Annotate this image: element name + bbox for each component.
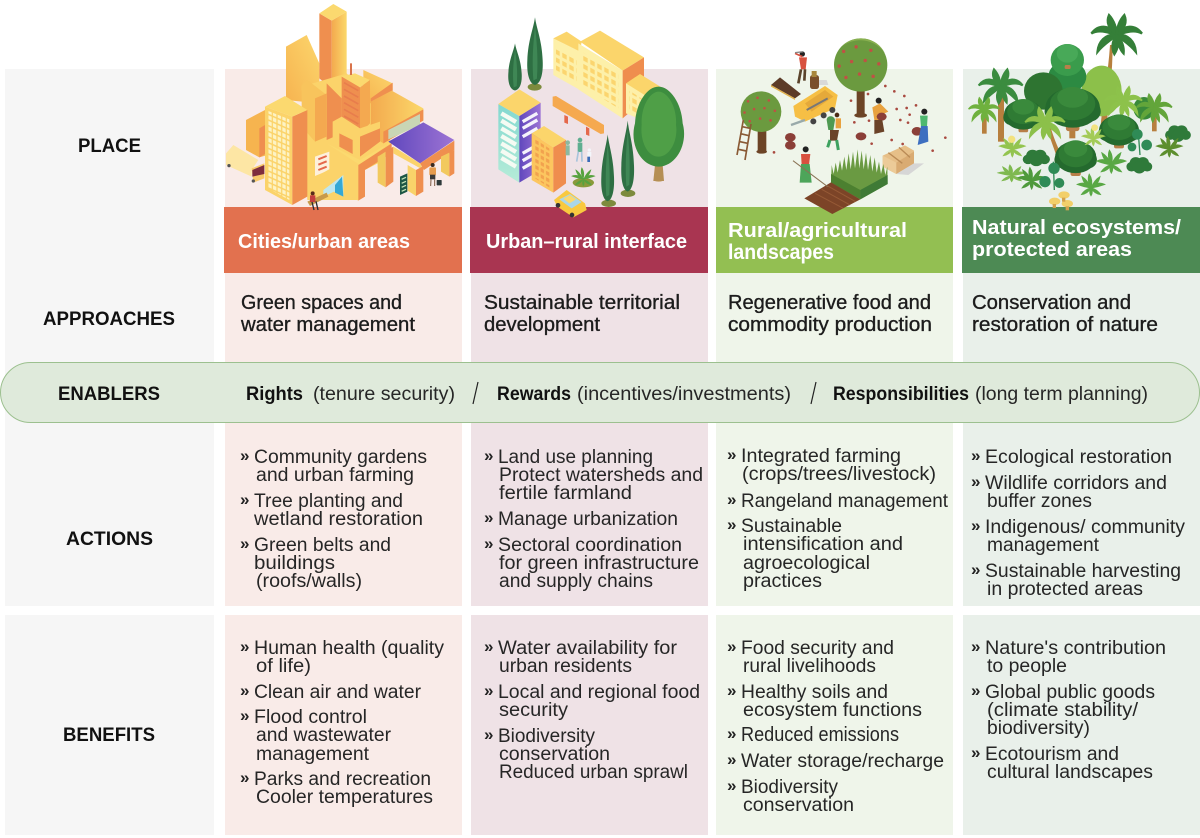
row label: benefits: BENEFITS (63, 725, 155, 746)
approaches text: rural: Regenerative food and (728, 292, 931, 314)
actions list: interface: » (484, 534, 493, 553)
header bar: natural: protected areas (972, 239, 1132, 261)
actions list: natural: in protected areas (987, 579, 1143, 600)
actions list: natural: management (987, 535, 1100, 556)
approaches text: interface: development (484, 314, 600, 336)
benefits list: interface: Biodiversity (498, 726, 595, 747)
panel: cities upper background (225, 69, 462, 606)
enablers band: Rights (246, 384, 303, 405)
actions list: cities (240, 446, 427, 592)
actions list: rural: » (727, 515, 736, 534)
benefits list: natural: biodiversity) (987, 718, 1090, 739)
benefits list: natural: Global public goods (985, 682, 1155, 703)
panel: label column upper background (5, 69, 214, 606)
benefits list: natural: » (971, 637, 980, 656)
approaches text: natural: restoration of nature (972, 314, 1158, 336)
benefits list: cities: » (240, 706, 249, 725)
enablers band: Responsibilities (833, 384, 969, 405)
actions list: natural: » (971, 472, 980, 491)
benefits list: natural: » (971, 743, 980, 762)
illustration: city buildings (226, 4, 454, 210)
illustration: rural farm scene (737, 38, 947, 214)
actions list: rural: Sustainable (741, 516, 842, 537)
benefits list: interface: » (484, 681, 493, 700)
header bar: rural: Rural/agricultural (728, 220, 907, 242)
actions list: rural: » (727, 490, 736, 509)
actions list: cities: » (240, 490, 249, 509)
enablers band: ENABLERS (58, 384, 160, 405)
benefits list: cities: Clean air and water (254, 682, 422, 703)
benefits list: natural: (climate stability/ (987, 700, 1139, 721)
actions list: natural: Wildlife corridors and (985, 473, 1167, 494)
benefits list: rural: Food security and (741, 638, 894, 659)
actions list: natural (971, 446, 1186, 600)
actions list: rural: intensification and (743, 534, 903, 555)
benefits list: rural: rural livelihoods (743, 656, 876, 677)
header bar: natural: Natural ecosystems/ (972, 217, 1181, 239)
benefits list: cities: » (240, 768, 249, 787)
panel: interface upper background (471, 69, 708, 606)
panel: label column lower background (5, 615, 214, 835)
panel: rural upper background (716, 69, 953, 606)
approaches text: interface: Sustainable territorial (484, 292, 680, 314)
panel: cities benefits background (225, 615, 462, 835)
actions list: cities: Green belts and (254, 535, 391, 556)
panel: interface benefits background (471, 615, 708, 835)
actions list: rural: Integrated farming (741, 446, 901, 467)
approaches text: cities (240, 292, 415, 336)
row label: actions: ACTIONS (66, 529, 153, 550)
benefits list: rural: Reduced emissions (741, 724, 899, 746)
benefits list: rural (727, 637, 944, 816)
header bar: rural: landscapes (728, 241, 834, 264)
actions list: rural (727, 445, 949, 592)
benefits list: natural: » (971, 681, 980, 700)
actions list: natural: Ecological restoration (985, 447, 1172, 468)
approaches text: natural (972, 292, 1158, 336)
actions list: interface: fertile farmland (499, 483, 632, 504)
enablers band: (tenure security) (313, 384, 455, 405)
benefits list: rural: Water storage/recharge (741, 751, 944, 772)
actions list: interface (484, 446, 703, 592)
benefits list: rural: conservation (743, 795, 854, 816)
header bar: cities: Cities/urban areas (238, 231, 410, 253)
enablers band (0, 362, 1200, 422)
approaches text: rural: commodity production (728, 314, 932, 336)
benefits list: interface: Reduced urban sprawl (499, 762, 688, 783)
actions list: natural: buffer zones (987, 491, 1092, 512)
benefits list: rural: » (727, 776, 736, 795)
approaches text: cities: water management (240, 314, 415, 336)
header bar: urban-rural interface (470, 207, 708, 273)
approaches text: cities: Green spaces and (241, 292, 402, 314)
benefits list: cities (240, 637, 445, 808)
benefits list: cities: » (240, 681, 249, 700)
header bar: natural (962, 207, 1200, 273)
header bar: rural (716, 207, 953, 273)
approaches text: natural: Conservation and (972, 292, 1131, 314)
benefits list: cities: management (256, 744, 370, 765)
actions list: natural: Indigenous/ community (985, 517, 1186, 538)
approaches text: interface (484, 292, 680, 336)
actions list: interface: » (484, 508, 493, 527)
actions list: interface: for green infrastructure (499, 553, 699, 574)
actions list: cities: (roofs/walls) (256, 571, 362, 592)
actions list: interface: Protect watersheds and (499, 465, 703, 486)
enablers band: Rewards (497, 384, 571, 405)
panel: natural upper background (963, 69, 1200, 606)
benefits list: rural: ecosystem functions (743, 700, 922, 721)
panel: rural benefits background (716, 615, 953, 835)
actions list: cities: Community gardens (254, 447, 427, 468)
benefits list: interface: urban residents (499, 656, 632, 677)
benefits list: interface: security (499, 700, 569, 721)
benefits list: interface: » (484, 725, 493, 744)
actions list: interface: Sectoral coordination (498, 535, 682, 556)
actions list: cities: buildings (254, 553, 335, 574)
benefits list: cities: » (240, 637, 249, 656)
actions list: interface: » (484, 446, 493, 465)
benefits list: rural: Healthy soils and (741, 682, 888, 703)
panel: natural benefits background (963, 615, 1200, 835)
approaches text: rural (728, 292, 932, 336)
enablers band: (incentives/investments) (577, 384, 791, 405)
benefits list: interface: Local and regional food (498, 682, 700, 703)
actions list: rural: » (727, 445, 736, 464)
benefits list: natural: Nature's contribution (985, 638, 1166, 659)
benefits list: natural: cultural landscapes (987, 762, 1153, 783)
actions list: cities: wetland restoration (253, 509, 423, 530)
benefits list: rural: » (727, 681, 736, 700)
benefits list: cities: of life) (256, 656, 311, 677)
actions list: interface: Land use planning (498, 447, 653, 468)
benefits list: interface: Water availability for (498, 638, 678, 659)
row label: approaches: APPROACHES (43, 309, 175, 330)
actions list: natural: Sustainable harvesting (985, 561, 1181, 582)
benefits list: cities: Flood control (254, 707, 367, 728)
benefits list: cities: Human health (quality (254, 638, 445, 659)
benefits list: rural: Biodiversity (741, 777, 838, 798)
actions list: cities: » (240, 446, 249, 465)
benefits list: cities: and wastewater (256, 725, 392, 746)
benefits list: rural: » (727, 750, 736, 769)
actions list: natural: » (971, 516, 980, 535)
actions list: natural: » (971, 446, 980, 465)
benefits list: interface: » (484, 637, 493, 656)
benefits list: cities: Cooler temperatures (256, 787, 433, 808)
illustration: forest (969, 15, 1191, 210)
benefits list: interface: conservation (499, 744, 610, 765)
benefits list: natural (971, 637, 1166, 783)
benefits list: natural: to people (987, 656, 1067, 677)
actions list: interface: and supply chains (499, 571, 653, 592)
actions list: cities: and urban farming (256, 465, 414, 486)
actions list: natural: » (971, 560, 980, 579)
benefits list: natural: Ecotourism and (985, 744, 1119, 765)
benefits list: rural: » (727, 724, 736, 743)
illustration: urban-rural interface (498, 17, 684, 217)
enablers band: (long term planning) (975, 384, 1148, 405)
benefits list: interface (484, 637, 700, 783)
actions list: interface: Manage urbanization (498, 509, 678, 530)
header bar: cities (224, 207, 462, 273)
benefits list: rural: » (727, 637, 736, 656)
actions list: rural: agroecological (743, 553, 870, 574)
actions list: rural: practices (743, 571, 822, 592)
row label: place: PLACE (78, 136, 141, 157)
actions list: cities: Tree planting and (254, 491, 403, 512)
actions list: rural: (crops/trees/livestock) (742, 464, 936, 485)
actions list: cities: » (240, 534, 249, 553)
benefits list: cities: Parks and recreation (254, 769, 431, 790)
header bar: urban-rural interface: Urban–rural interface (486, 231, 687, 253)
actions list: rural: Rangeland management (741, 491, 949, 512)
